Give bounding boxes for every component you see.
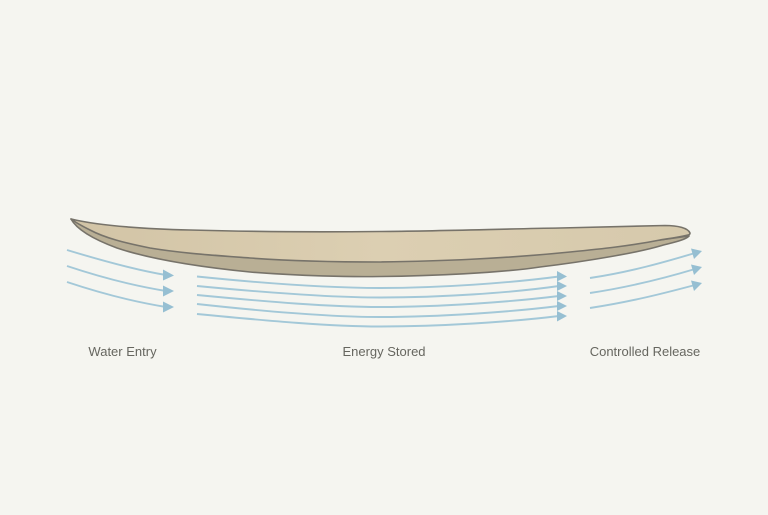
water entry arrows — [67, 250, 174, 312]
board rail underside — [71, 219, 689, 277]
board deck — [71, 219, 690, 262]
label: controlled release: Controlled Release — [590, 344, 700, 359]
label: water entry: Water Entry — [88, 344, 157, 359]
label: energy stored: Energy Stored — [342, 344, 426, 359]
surfboard — [71, 219, 690, 277]
controlled release arrows — [590, 248, 702, 308]
energy stored arrows — [197, 271, 567, 326]
